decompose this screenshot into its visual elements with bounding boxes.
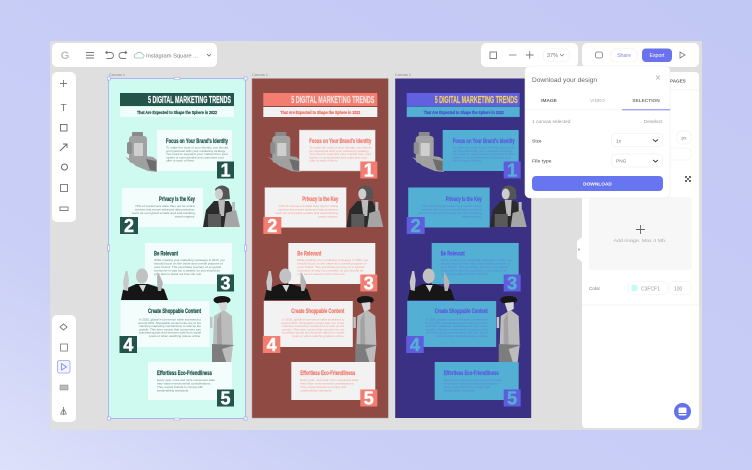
number 5: 5 <box>220 388 231 408</box>
color row: Color <box>589 286 600 291</box>
card 1: brand identity: go hyperlocal with your marketing strategy. <box>166 149 226 153</box>
color row <box>589 282 692 294</box>
number 5: 5 <box>507 388 517 408</box>
panel: left tool bar <box>52 72 76 222</box>
photo: woman in coat <box>497 296 522 362</box>
photo: man with thumbs up <box>264 268 311 300</box>
card 4: shoppable content: Create Shoppable Content <box>148 309 201 315</box>
card 4: shoppable content: posts or when watching videos online. <box>149 334 201 338</box>
canvas label 2: Canvas 1 <box>252 73 268 77</box>
share button: Share <box>617 53 631 59</box>
file type label: File type <box>532 158 552 164</box>
number 1: 1 <box>364 160 374 180</box>
card 5: eco-friendliness: They expect brands to comply with <box>157 385 203 389</box>
export button: Export <box>650 53 665 59</box>
number 2 <box>120 216 138 236</box>
download button: DOWNLOAD <box>583 182 612 188</box>
app workspace <box>50 41 702 430</box>
card 4: shoppable content <box>407 301 496 347</box>
card 4: shoppable content: posts or when watching videos online. <box>436 334 488 338</box>
photo: hand holding bottle <box>412 132 444 172</box>
photo: woman in coat <box>353 296 378 362</box>
card 2: privacy: 74% of consumers state they opt for online <box>278 204 339 208</box>
dialog title: Download your design <box>532 78 597 84</box>
file type select: PNG <box>616 158 627 164</box>
size label: Size <box>532 138 542 144</box>
panel: zoom toolbar <box>481 43 578 67</box>
subtitle <box>407 106 520 117</box>
icon: redo <box>119 51 127 58</box>
panel: right properties <box>582 72 699 428</box>
card 3: be relevant: While creating your marketing messages in 2022, you <box>441 258 512 262</box>
card 4: shoppable content: Create Shoppable Content <box>435 309 488 315</box>
file name: Instagram Square ... <box>146 54 198 60</box>
number 3 <box>504 274 521 294</box>
icon: cloud <box>134 52 144 58</box>
card 1: brand identity <box>443 130 519 171</box>
icon: transparency <box>685 176 691 182</box>
canvas label 3: Canvas 1 <box>395 73 411 77</box>
card 4: shoppable content: In 2020, global e-commerce sales increased to <box>139 318 201 322</box>
panel: top-right actions <box>582 43 699 67</box>
card 3: be relevant: your best to stand out from the rest. <box>441 272 489 276</box>
number 2: 2 <box>124 216 134 236</box>
icon: logo: G <box>61 50 69 62</box>
subtitle: That Are Expected to Shape the Sphere in 2022 <box>280 110 361 115</box>
zoom value: 37% <box>547 53 558 59</box>
card 3: be relevant: should focus on the value and overall purpose of <box>297 262 367 266</box>
icon: chevron <box>207 54 211 56</box>
card 3: be relevant <box>432 243 519 284</box>
tab: selection: SELECTION <box>632 98 660 104</box>
number 4: 4 <box>267 335 277 355</box>
panel: purple canvas <box>395 78 531 418</box>
icon: zoom in <box>526 51 534 59</box>
card 3: be relevant: Be Relevant <box>297 252 321 258</box>
canvas label 1: Canvas 1 <box>109 73 125 77</box>
subtitle <box>263 107 377 117</box>
card 1: brand identity: You need to segment your market from your <box>309 152 371 156</box>
card 5: eco-friendliness: Effortless Eco-Friendliness <box>300 371 356 377</box>
card 1: brand identity: niches or communities and customize your <box>453 155 511 159</box>
card 3: be relevant: Be Relevant <box>441 252 465 258</box>
number 2 <box>263 216 281 236</box>
download button <box>532 176 663 191</box>
tab underline <box>525 109 670 111</box>
add image dropzone: Add image. Max 4 Mb. <box>614 238 666 243</box>
card 2: privacy <box>408 188 490 228</box>
card 3: be relevant: your best to stand out from the rest. <box>297 272 345 276</box>
photo: hand holding bottle <box>125 132 157 172</box>
card 4: shoppable content: main/top marketing mechanisms to rack up the <box>426 324 488 328</box>
card 4: shoppable content: main/top marketing mechanisms to rack up the <box>139 324 201 328</box>
card 4: shoppable content: growth. This term means that consumers can <box>139 327 201 331</box>
card 1: brand identity: offer to each of them. <box>453 159 482 163</box>
icon: close <box>656 76 660 80</box>
card 1: brand identity: Focus on Your Brand's Identity <box>309 139 372 145</box>
card 4: shoppable content: around 26%. Shoppable content was one of the <box>138 321 201 325</box>
number 1: 1 <box>220 160 231 180</box>
card 4: shoppable content: In 2020, global e-commerce sales increased to <box>426 318 488 322</box>
icon: text tool: T <box>60 103 67 114</box>
icon: image tool <box>60 184 68 192</box>
card 1: brand identity: offer to each of them. <box>166 159 195 163</box>
card 2: privacy: services that ensure advanced data protection, <box>135 208 195 212</box>
icon: play <box>680 52 685 58</box>
card 4: shoppable content <box>264 301 353 347</box>
number 5: 5 <box>364 388 374 408</box>
icon: select active <box>58 360 70 373</box>
number 3: 3 <box>220 274 231 294</box>
card 5: eco-friendliness: Effortless Eco-Friendliness <box>157 371 212 377</box>
card 3: be relevant <box>145 243 232 284</box>
card 3: be relevant: consumer is way too crowded, so you should do <box>441 268 507 272</box>
card 2: privacy: 74% of consumers state they opt for online <box>422 204 482 208</box>
card 2: privacy: search engines. <box>318 214 338 218</box>
card 4: shoppable content: purchase goods and services right from social <box>282 331 345 335</box>
card 4: shoppable content: growth. This term means that consumers can <box>282 327 345 331</box>
card 1: brand identity <box>299 130 375 171</box>
card 5: eco-friendliness: sustainability standards. <box>300 388 332 392</box>
panel: green canvas <box>108 77 247 420</box>
card 4: shoppable content: purchase goods and services right from social <box>139 331 201 335</box>
card 2: privacy: such as encrypted emails and anti-tracking <box>275 211 339 215</box>
number 4: 4 <box>123 335 133 355</box>
number 1 <box>504 160 521 180</box>
card 2: privacy: such as encrypted emails and anti-tracking <box>419 211 482 215</box>
icon: help plant <box>60 407 67 415</box>
card 2: privacy: search engines. <box>462 214 482 218</box>
icon: shape tool <box>60 124 67 131</box>
card 4: shoppable content: purchase goods and services right from social <box>426 331 488 335</box>
card 3: be relevant: While creating your marketing messages in 2022, you <box>297 258 369 262</box>
icon: fit to screen <box>490 52 496 58</box>
card 5: eco-friendliness: Effortless Eco-Friendliness <box>444 371 499 377</box>
icon: undo <box>106 51 114 58</box>
card 5: eco-friendliness: They expect brands to comply with <box>300 385 347 389</box>
card 4: shoppable content <box>120 301 210 347</box>
title banner <box>263 93 377 106</box>
number 1 <box>360 160 377 180</box>
number 3 <box>217 274 234 294</box>
selection handles <box>108 77 247 420</box>
card 4: shoppable content: growth. This term means that consumers can <box>426 327 488 331</box>
help button <box>674 403 691 420</box>
card 2: privacy <box>122 188 203 227</box>
icon: ruler tool <box>60 207 68 210</box>
number 4: 4 <box>410 335 420 355</box>
pages tab: PAGES <box>670 78 686 84</box>
photo: man with thumbs up <box>121 268 168 300</box>
card 2: privacy: Privacy is the Key <box>302 197 339 203</box>
card 4: shoppable content: around 26%. Shoppable content was one of the <box>425 321 488 325</box>
number 5 <box>360 388 377 408</box>
card 1: brand identity: niches or communities and customize your <box>309 155 367 159</box>
card 5: eco-friendliness: Every year, more and more consumers state <box>300 378 359 382</box>
card 2: privacy: services that ensure advanced data protection, <box>422 208 482 212</box>
size unit field: px <box>681 136 687 142</box>
photo: woman with bags <box>346 186 383 227</box>
card 1: brand identity: go hyperlocal with your marketing strategy. <box>309 149 370 153</box>
number 2: 2 <box>267 216 277 236</box>
card 1: brand identity: go hyperlocal with your marketing strategy. <box>453 149 513 153</box>
subtitle: That Are Expected to Shape the Sphere in 2022 <box>424 110 504 115</box>
number 4 <box>120 335 137 355</box>
card 1: brand identity: To make the most of your Identity, you should <box>309 146 372 150</box>
card 3: be relevant: your best to stand out from the rest. <box>154 272 202 276</box>
title banner: 5 DIGITAL MARKETING TRENDS <box>148 95 231 106</box>
subtitle: That Are Expected to Shape the Sphere in 2022 <box>137 110 217 115</box>
number 5 <box>217 388 234 408</box>
card 1: brand identity: To make the most of your Identity, you should <box>453 146 515 150</box>
number 4 <box>406 335 424 355</box>
card 4: shoppable content: In 2020, global e-commerce sales increased to <box>282 318 345 322</box>
card 3: be relevant: your brand. The purchase journey of a typical <box>441 265 508 269</box>
card 2: privacy: such as encrypted emails and anti-tracking <box>132 211 195 215</box>
card 1: brand identity: You need to segment your market from your <box>166 152 228 156</box>
active underline <box>622 109 670 111</box>
card 3: be relevant: consumer is way too crowded, so you should do <box>154 268 220 272</box>
card 4: shoppable content: Create Shoppable Content <box>291 309 344 315</box>
add image dropzone <box>589 197 692 270</box>
card 2: privacy: search engines. <box>175 214 195 218</box>
card 2: privacy: 74% of consumers state they opt for online <box>135 204 195 208</box>
photo: woman with bags <box>203 186 240 227</box>
card 3: be relevant: consumer is way too crowded, so you should do <box>297 268 364 272</box>
icon: arrow tool <box>60 144 67 151</box>
deselect link: Deselect <box>644 119 663 125</box>
number 2 <box>407 216 425 236</box>
card 4: shoppable content: around 26%. Shoppable content was one of the <box>281 321 345 325</box>
panel: left lower tool bar <box>52 315 76 422</box>
card 3: be relevant: your brand. The purchase journey of a typical <box>154 265 221 269</box>
icon: resize canvas <box>60 344 68 351</box>
title banner <box>120 93 234 106</box>
file type select <box>612 154 662 167</box>
card 1: brand identity: You need to segment your market from your <box>453 152 515 156</box>
panel: red canvas <box>252 78 388 418</box>
title banner: 5 DIGITAL MARKETING TRENDS <box>435 95 518 106</box>
size select <box>612 134 662 146</box>
title banner: 5 DIGITAL MARKETING TRENDS <box>291 95 374 106</box>
card 5: eco-friendliness: sustainability standards. <box>444 388 476 392</box>
card 5: eco-friendliness: They expect brands to comply with <box>444 385 490 389</box>
card 2: privacy: services that ensure advanced data protection, <box>278 208 338 212</box>
card 5: eco-friendliness: Every year, more and more consumers state <box>444 378 502 382</box>
tab: video: VIDEO <box>590 98 605 104</box>
number 5 <box>504 388 521 408</box>
size select: 1x <box>616 138 622 144</box>
icon: comment <box>596 52 602 58</box>
icon: add <box>60 80 67 87</box>
card 5: eco-friendliness: Every year, more and more consumers state <box>157 378 215 382</box>
card 1: brand identity: offer to each of them. <box>309 159 339 163</box>
panel: top-left file toolbar <box>52 43 217 67</box>
title banner <box>407 93 520 106</box>
subtitle <box>120 107 234 117</box>
card 5: eco-friendliness: they value environmental considerations. <box>444 382 498 386</box>
photo: man with thumbs up <box>408 268 455 300</box>
card 3: be relevant: While creating your marketing messages in 2022, you <box>154 258 225 262</box>
card 2: privacy: Privacy is the Key <box>446 197 482 203</box>
card 3: be relevant: should focus on the value and overall purpose of <box>441 262 510 266</box>
size unit field <box>677 131 691 144</box>
card 5: eco-friendliness: sustainability standards. <box>157 388 189 392</box>
tab: image: IMAGE <box>541 98 558 104</box>
card 5: eco-friendliness <box>148 362 232 400</box>
color row: 100 <box>674 286 683 292</box>
card 4: shoppable content: main/top marketing mechanisms to rack up the <box>282 324 345 328</box>
photo: woman in coat <box>210 296 235 362</box>
card 5: eco-friendliness: they value environmental considerations. <box>157 382 211 386</box>
number 1: 1 <box>507 160 517 180</box>
card 2: privacy <box>265 188 346 228</box>
card 1: brand identity: Focus on Your Brand's Identity <box>453 139 515 145</box>
selection status: 1 canvas selected <box>532 119 571 125</box>
card 1: brand identity: niches or communities and customize your <box>166 155 224 159</box>
card 3: be relevant: Be Relevant <box>154 252 178 258</box>
card 5: eco-friendliness: they value environmental considerations. <box>300 382 354 386</box>
card 4: shoppable content: posts or when watching videos online. <box>292 334 344 338</box>
field <box>660 148 691 160</box>
card 3: be relevant <box>288 243 375 284</box>
panel: download dialog <box>525 66 670 198</box>
icon: menu <box>86 52 94 58</box>
card 1: brand identity <box>157 130 232 171</box>
card 2: privacy: Privacy is the Key <box>159 197 195 203</box>
number 1 <box>217 160 234 180</box>
card 1: brand identity: Focus on Your Brand's Identity <box>166 139 228 145</box>
photo: hand holding bottle <box>268 132 300 172</box>
number 2: 2 <box>411 216 421 236</box>
card 1: brand identity: To make the most of your Identity, you should <box>166 146 228 150</box>
card 5: eco-friendliness <box>291 362 375 400</box>
number 3 <box>360 274 377 294</box>
number 3: 3 <box>364 274 374 294</box>
icon: zoom out <box>509 54 516 56</box>
number 3: 3 <box>507 274 517 294</box>
card 3: be relevant: your brand. The purchase journey of a typical <box>297 265 365 269</box>
color row: C3FCF1 <box>641 286 660 292</box>
card 3: be relevant: should focus on the value and overall purpose of <box>154 262 223 266</box>
collapse handle <box>577 237 582 262</box>
number 4 <box>263 335 280 355</box>
icon: keyboard <box>60 385 68 390</box>
icon: layers <box>60 324 67 330</box>
card 5: eco-friendliness <box>435 362 519 400</box>
photo: woman with bags <box>490 186 527 227</box>
icon: search element <box>62 164 68 170</box>
